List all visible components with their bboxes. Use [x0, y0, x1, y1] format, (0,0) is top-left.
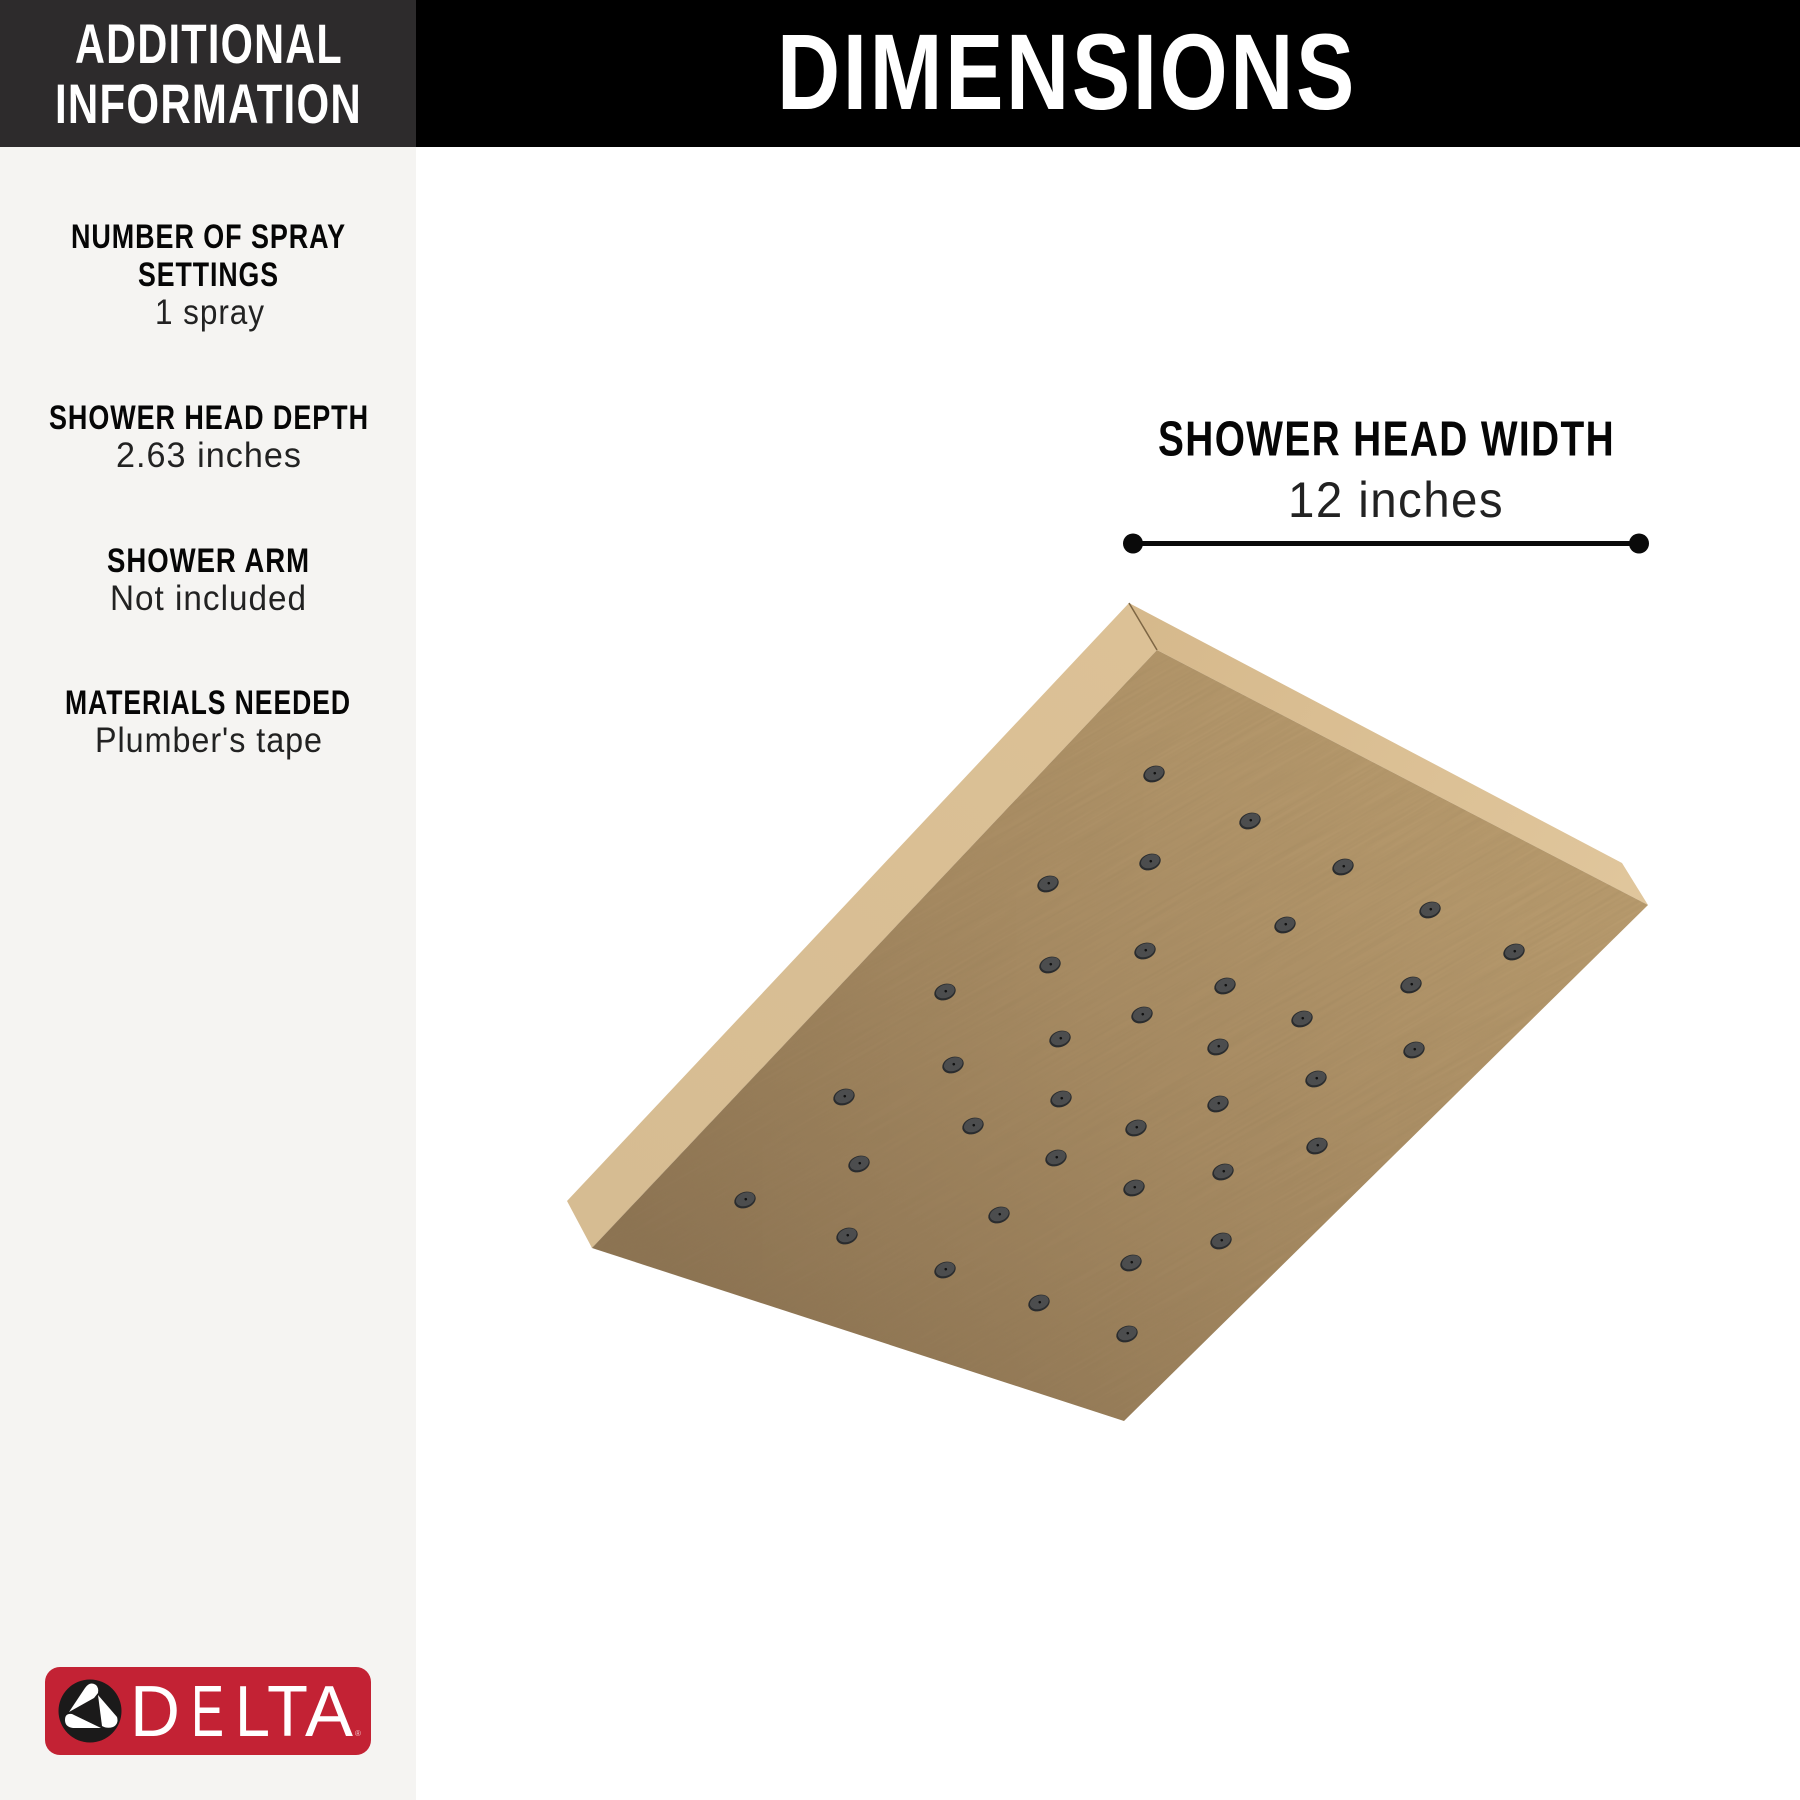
text block: materials needed: Plumber's tape: [95, 721, 323, 760]
left bevel edge: [567, 603, 1157, 1248]
wordmark: DELTA: D: [130, 1672, 180, 1752]
text block: shower arm: SHOWER ARM: [107, 542, 310, 580]
header: dimensions title: DIMENSIONS: [777, 11, 1357, 132]
wordmark: DELTA: A: [305, 1672, 353, 1752]
logo: delta: ®: [355, 1729, 361, 1738]
dimension label: shower head width: 12 inches: [1288, 472, 1504, 528]
top bevel edge: [1129, 603, 1648, 905]
front face: [592, 650, 1648, 1421]
text block: number of spray settings: [71, 218, 346, 332]
text block: materials needed: MATERIALS NEEDED: [65, 684, 351, 722]
dimension line with end dots: [1123, 534, 1649, 554]
text block: number of spray settings: NUMBER OF SPRAY: [71, 218, 346, 256]
bevel corner crease: [1129, 603, 1157, 650]
wordmark: DELTA: [130, 1672, 353, 1752]
wordmark: DELTA: T: [267, 1672, 308, 1752]
text block: number of spray settings: 1 spray: [155, 293, 265, 332]
text block: shower head depth: 2.63 inches: [116, 436, 302, 475]
text block: materials needed: [65, 684, 351, 760]
header: additional information: ADDITIONAL: [75, 12, 343, 75]
header: additional information: [0, 0, 416, 147]
header: dimensions title: [416, 0, 1800, 147]
text block: shower head depth: SHOWER HEAD DEPTH: [49, 399, 369, 437]
illustration: shower head: [567, 602, 1648, 1421]
text block: shower arm: Not included: [110, 579, 307, 618]
text block: number of spray settings: SETTINGS: [138, 256, 279, 294]
spray nozzles: [732, 763, 1527, 1345]
dimension label: shower head width: [1158, 412, 1615, 528]
panel: sidebar background: [0, 147, 416, 1800]
wordmark: DELTA: E: [191, 1672, 224, 1752]
logo: delta: [45, 1667, 371, 1755]
icon: delta emblem: [58, 1680, 122, 1742]
header: additional information: INFORMATION: [55, 72, 362, 135]
dimension label: shower head width: SHOWER HEAD WIDTH: [1158, 412, 1615, 466]
text block: shower arm: [107, 542, 310, 618]
text block: shower head depth: [49, 399, 369, 475]
wordmark: DELTA: L: [235, 1672, 270, 1752]
brushed metal texture: [591, 923, 899, 1313]
